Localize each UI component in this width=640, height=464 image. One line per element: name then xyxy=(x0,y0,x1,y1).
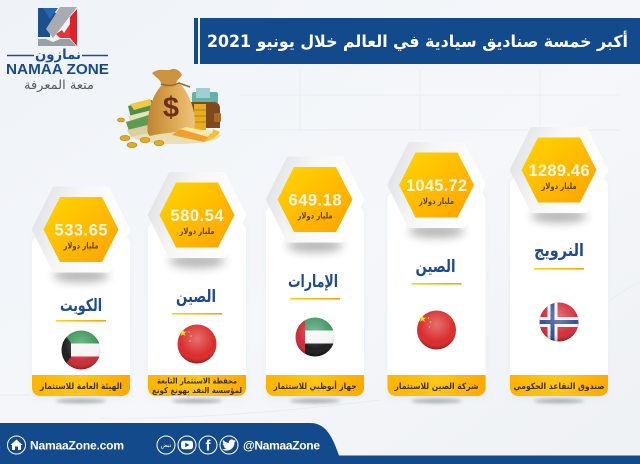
flag: Norway xyxy=(539,302,579,342)
footer xyxy=(0,423,640,464)
country name: الصين xyxy=(416,257,456,277)
description strip xyxy=(388,375,486,396)
logo arabic name: نمازون xyxy=(35,47,81,63)
fund name: شركة الصين للاستثمار xyxy=(394,382,478,392)
country name: الإمارات xyxy=(288,272,338,292)
title bar xyxy=(194,18,640,64)
underline xyxy=(56,320,106,322)
bottom shadow xyxy=(412,399,462,403)
dollar sign: $ xyxy=(163,92,179,124)
icon: facebook: f xyxy=(206,438,212,454)
flag: China xyxy=(178,324,216,364)
fund name: الهيئة العامة للاستثمار xyxy=(39,382,122,392)
icon: facebook xyxy=(199,436,217,454)
panel: Norway xyxy=(510,130,608,403)
hexagon badge xyxy=(35,190,127,282)
bottom shadow xyxy=(534,399,584,403)
country name: الكويت xyxy=(60,296,102,316)
description strip xyxy=(32,375,130,396)
value: 1045.72 xyxy=(406,177,467,195)
value: 1289.46 xyxy=(528,162,590,180)
panel: China Hong Kong xyxy=(148,175,246,403)
fund name line 2: لمؤسسة النقد بهونغ كونغ xyxy=(152,386,242,395)
unit: مليار دولار xyxy=(418,197,454,207)
icon: money bag xyxy=(118,69,221,148)
logo xyxy=(6,7,109,93)
panel: China xyxy=(388,145,486,403)
logo latin name: NAMAA ZONE xyxy=(6,62,109,78)
card body xyxy=(510,177,608,398)
icon: sack top xyxy=(152,69,182,87)
logo lines xyxy=(7,54,108,56)
country name: الصين xyxy=(176,287,216,307)
hexagon badge xyxy=(390,145,482,238)
description strip xyxy=(266,375,364,396)
underline xyxy=(172,313,222,315)
card body xyxy=(32,236,130,398)
value: 649.18 xyxy=(288,192,342,210)
flag: China xyxy=(417,310,456,350)
value: 533.65 xyxy=(54,222,108,240)
bottom shadow xyxy=(172,399,222,403)
social handle: @NamaaZone xyxy=(243,438,320,452)
fund name line 1: محفظة الاستثمار التابعة xyxy=(157,376,237,386)
hexagon badge xyxy=(513,130,605,223)
country name: النرويج xyxy=(534,241,584,261)
unit: مليار دولار xyxy=(63,242,98,252)
underline xyxy=(290,298,340,300)
logo tagline: متعة المعرفة xyxy=(24,77,94,93)
logo mark xyxy=(38,7,77,46)
unit: مليار دولار xyxy=(541,182,576,192)
icon: sack xyxy=(147,84,195,136)
icon: twitter xyxy=(220,436,238,454)
panel: Kuwait xyxy=(32,190,130,403)
background chart pattern xyxy=(0,70,640,418)
underline xyxy=(412,283,462,285)
description strip xyxy=(510,375,608,396)
icon: nabd xyxy=(157,436,175,454)
title: أكبر خمسة صناديق سيادية في العالم خلال يونيو 2021 xyxy=(207,31,628,52)
bottom shadow xyxy=(290,399,340,403)
card body xyxy=(266,206,364,398)
unit: مليار دولار xyxy=(297,212,332,222)
panel: UAE xyxy=(266,160,364,403)
icon: home xyxy=(8,436,26,454)
website: NamaaZone.com xyxy=(30,438,124,452)
unit: مليار دولار xyxy=(179,227,214,237)
bottom shadow xyxy=(56,399,106,403)
card body xyxy=(148,222,246,398)
fund name: جهاز أبوظبي للاستثمار xyxy=(273,380,356,392)
fund name: صندوق التقاعد الحكومي xyxy=(514,382,604,392)
card body xyxy=(388,192,486,398)
icon: coins xyxy=(118,118,164,148)
description strip xyxy=(148,375,246,396)
flag: UAE xyxy=(295,317,335,357)
icon: wallet xyxy=(190,88,221,130)
hexagon badge xyxy=(269,160,361,252)
flag: Kuwait xyxy=(61,330,101,370)
icon: youtube xyxy=(178,436,196,454)
icon: gold bar xyxy=(172,127,220,142)
hexagon badge xyxy=(151,175,243,268)
icon: banknotes xyxy=(126,99,152,137)
underline xyxy=(534,268,584,270)
value: 580.54 xyxy=(170,207,224,225)
icon: nabd: نبض xyxy=(161,442,172,449)
